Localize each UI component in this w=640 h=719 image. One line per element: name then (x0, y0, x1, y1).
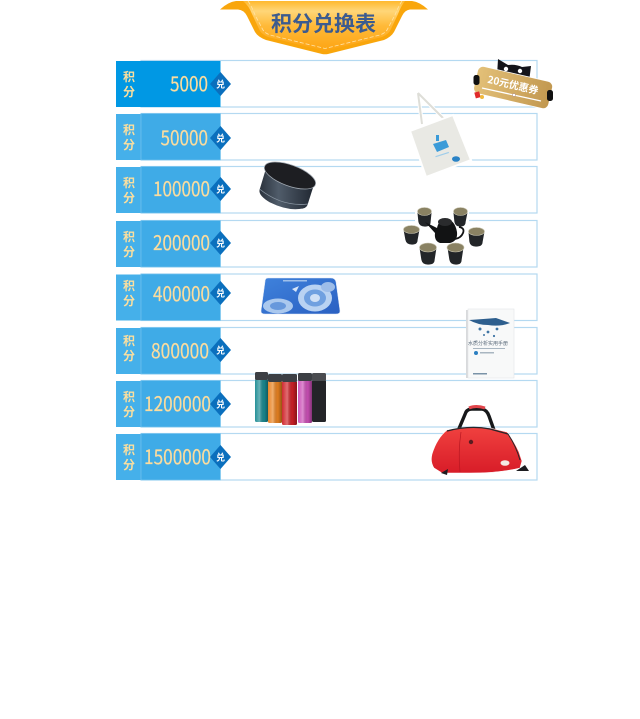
title banner (220, 1, 428, 54)
icon: red duffel bag (431, 406, 529, 475)
row: 50000 points: 兑 (216, 132, 225, 144)
icon: coupon with black cat (473, 59, 553, 109)
row: 800000 points (116, 328, 537, 374)
icon: bluetooth speaker (259, 156, 319, 210)
book title: 水质分析实用手册 (468, 340, 508, 347)
row: 50000 points (116, 114, 537, 160)
row: 400000 points: 400000 (153, 278, 210, 307)
row: 100000 points: 分 (123, 191, 135, 205)
icon: five thermos flasks (255, 372, 326, 425)
row: 400000 points (116, 274, 537, 320)
icon: tote bag (410, 93, 471, 177)
row: 1200000 points: 积 (123, 389, 135, 404)
row: 100000 points: 兑 (216, 184, 225, 194)
row: 200000 points: 分 (123, 245, 135, 259)
row: 1500000 points: 积 (123, 442, 135, 457)
row: 1200000 points: 1200000 (144, 388, 211, 417)
row: 800000 points: 兑 (216, 344, 225, 356)
icon: rose mouse pad (261, 278, 340, 314)
row: 1500000 points: 兑 (216, 452, 225, 462)
row: 5000 points: 兑 (216, 78, 225, 90)
row: 100000 points (116, 166, 537, 213)
title text: 积分兑换表 (271, 8, 376, 38)
row: 5000 points (116, 60, 537, 107)
row: 5000 points: 分 (123, 85, 135, 99)
row: 1200000 points (116, 380, 537, 427)
row: 50000 points: 50000 (160, 122, 208, 151)
row: 50000 points: 分 (123, 138, 135, 152)
row: 1200000 points: 兑 (216, 398, 225, 410)
row: 50000 points: 积 (123, 122, 135, 137)
row: 100000 points: 积 (123, 175, 135, 190)
row: 1200000 points: 分 (123, 405, 135, 419)
row: 1500000 points (116, 434, 537, 480)
icon: handbook (466, 309, 514, 378)
icon: tea set (403, 205, 485, 265)
row: 100000 points: 100000 (153, 173, 210, 202)
row: 200000 points: 200000 (153, 227, 210, 256)
row: 800000 points: 积 (123, 333, 135, 348)
row: 200000 points: 兑 (216, 238, 225, 248)
row: 1500000 points: 1500000 (144, 441, 211, 470)
row: 400000 points: 兑 (216, 288, 225, 298)
row: 5000 points: 积 (123, 69, 135, 84)
row: 200000 points (116, 220, 537, 267)
row: 400000 points: 积 (123, 278, 135, 293)
row: 800000 points: 800000 (151, 335, 209, 364)
row: 200000 points: 积 (123, 229, 135, 244)
row: 1500000 points: 分 (123, 458, 135, 472)
row: 400000 points: 分 (123, 294, 135, 308)
row: 800000 points: 分 (123, 349, 135, 363)
coupon text: 20元优惠券 (486, 71, 540, 97)
row: 5000 points: 5000 (170, 68, 208, 97)
